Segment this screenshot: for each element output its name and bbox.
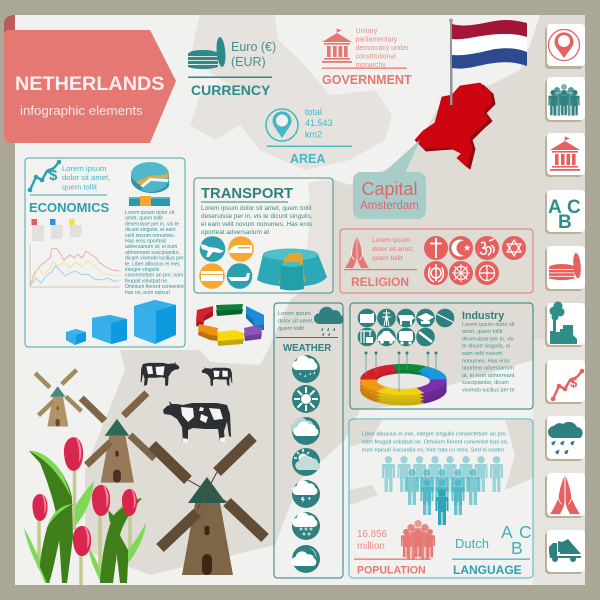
capital callout <box>353 140 426 219</box>
icon: map pin <box>266 109 298 141</box>
industry text: suscipiantur, dicam <box>462 380 509 386</box>
industry text: at, ei eum abhorreant <box>462 373 515 379</box>
sidebar tile: rain <box>545 416 585 461</box>
currency text: Euro (€) <box>231 40 276 54</box>
weather intro: quem tollit <box>278 326 304 332</box>
sidebar tile: pin <box>545 24 585 69</box>
population figure: 16.856 <box>357 529 387 540</box>
government text: Unitary <box>356 28 377 35</box>
cow small left <box>141 362 179 386</box>
industry heading: Industry <box>462 310 504 322</box>
icon: sun <box>292 385 320 413</box>
transport text: deseruisse per in, vis te dicunt singulis, <box>201 213 313 220</box>
economics text: Lorem ipsum dolor sit <box>125 210 174 216</box>
economics intro: quem tollit <box>62 182 98 192</box>
cubes chart <box>66 300 176 345</box>
industry icons <box>358 309 454 346</box>
economics text: dicunt singulis, ei eam <box>125 227 176 233</box>
sidebar tile: growth graph: $ <box>570 375 578 390</box>
economics text: velit novum nonumes. <box>125 233 175 239</box>
religion heading: RELIGION <box>351 275 409 289</box>
icon: praying hands <box>345 237 369 268</box>
transport text: ei eam velit novum nonumes. Has eros <box>201 221 312 228</box>
windmill large <box>152 437 265 575</box>
industry text: Lorem ipsum dolor sit <box>462 322 515 328</box>
pie chart <box>131 162 169 193</box>
economics text: feugait volutpat ne. <box>125 278 168 284</box>
icon: growth graph: $ <box>49 167 58 184</box>
tulip heads <box>64 437 83 471</box>
icon: airplane <box>200 236 225 262</box>
people chart <box>382 456 503 525</box>
sidebar tile: hands <box>545 473 585 518</box>
area text: km2 <box>305 130 322 140</box>
bar strip <box>129 196 170 206</box>
ring chart <box>364 352 438 403</box>
economics text: Omnium fierent convenire <box>125 284 184 290</box>
tulip stems <box>39 468 130 585</box>
subtitle: infographic elements <box>20 103 143 118</box>
title ribbon <box>4 15 176 143</box>
language letters: A <box>501 522 513 542</box>
icon: moon and cloud <box>291 545 320 573</box>
industry text: te dicunt singulis, ei <box>462 344 510 350</box>
capital name: Amsterdam <box>360 200 419 212</box>
segmented ring <box>196 304 264 346</box>
panel: industry <box>350 303 533 409</box>
religion intro: dolor sit amet, <box>372 246 414 253</box>
area block <box>266 107 352 166</box>
sidebar tile: language <box>545 190 585 234</box>
icon: snow <box>292 512 320 540</box>
area text: 41.543 <box>305 118 333 128</box>
religion intro: Lorem ipsum <box>372 237 411 244</box>
transport heading: TRANSPORT <box>201 186 293 202</box>
windmill small <box>35 370 81 426</box>
flag <box>449 18 527 105</box>
transport text: oporteat adversarium at <box>201 229 269 236</box>
3D segment chart <box>257 248 327 290</box>
sidebar tile: truck <box>545 530 585 574</box>
population text: nam feugait volutpat ne. Omnium fierent convenire has no, <box>362 440 509 446</box>
area text: total <box>305 107 322 117</box>
government text: monarchy <box>356 62 386 69</box>
currency text: (EUR) <box>231 55 266 69</box>
icon: growth graph <box>28 160 61 192</box>
currency heading: CURRENCY <box>191 82 271 98</box>
icon: truck <box>199 263 225 289</box>
cow small right <box>202 367 232 386</box>
industry text: nonumes. Has eros <box>462 358 510 364</box>
government text: parliamentary <box>356 36 398 44</box>
population figure: million <box>357 541 385 552</box>
title: NETHERLANDS <box>15 73 164 95</box>
icon: government building <box>322 29 352 63</box>
line chart <box>30 219 120 287</box>
economics intro: dolor sit amet, <box>62 173 110 182</box>
icon: population group <box>401 520 435 560</box>
icon: cloudy <box>290 417 320 445</box>
icon: train <box>228 236 254 262</box>
sidebar tile: language: A <box>548 197 562 218</box>
weather intro: Lorem ipsum <box>278 311 311 317</box>
panel: population and language <box>349 419 533 578</box>
industry text: deseruisse per in, vis <box>462 336 514 342</box>
language name: Dutch <box>455 536 489 551</box>
religion intro: quem tollit <box>372 255 403 262</box>
icon: cross <box>424 236 448 260</box>
government block <box>322 28 412 87</box>
transport text: Lorem ipsum dolor sit amet, quem tollit <box>201 205 312 212</box>
cow large <box>163 401 231 443</box>
icon: sun cross <box>475 261 499 285</box>
industry text: amet, quem tollit <box>462 329 503 335</box>
population text: eum epicuri iracundia ex, hinc tota cu mea. Sed ei nostro <box>362 448 504 454</box>
economics text: deseruisse per in, vis te <box>125 221 179 227</box>
economics text: integre singulis <box>125 267 160 273</box>
economics text: dicam vivendo lucilius per <box>125 256 184 262</box>
icon: crescent <box>449 236 473 260</box>
icon: coins <box>188 37 227 69</box>
icon: rain cloud <box>314 307 344 336</box>
windmill medium <box>81 393 155 483</box>
panel: religion <box>340 229 533 293</box>
capital label: Capital <box>361 179 418 199</box>
economics heading: ECONOMICS <box>29 200 110 215</box>
icon: ship <box>227 263 252 289</box>
language letters: C <box>519 522 532 542</box>
economics text: consectetuer an pro, nam <box>125 273 183 279</box>
economics text: te. Liber albucius ei mei, <box>125 261 180 267</box>
government text: democracy under <box>356 45 409 52</box>
sidebar tile: people <box>545 77 585 122</box>
icon: rain <box>292 355 320 383</box>
icon: khanda <box>424 261 448 285</box>
icon: sun and cloud <box>292 448 320 476</box>
industry text: eam velit novum <box>462 351 502 357</box>
sidebar tile: growth graph <box>545 360 585 404</box>
language letters: B <box>511 538 523 558</box>
economics text: amet, quem tollit <box>125 216 163 222</box>
panel: economics <box>25 158 185 347</box>
weather heading: WEATHER <box>283 343 331 354</box>
sidebar tile: factory <box>545 302 585 347</box>
area heading: AREA <box>290 152 325 166</box>
industry text: vivendo lucilius per te <box>462 388 515 394</box>
icon: star of David <box>502 236 526 260</box>
sidebar tile: coins <box>545 246 585 291</box>
tulips <box>24 437 146 585</box>
government text: constitutional <box>356 54 396 60</box>
economics text: abhorreant suscipiantur, <box>125 250 180 256</box>
sidebar tile: language: B <box>558 212 572 233</box>
economics text: Has eros oporteat <box>125 238 166 244</box>
panel: weather <box>274 303 344 578</box>
economics text: adversarium at, ei eum <box>125 244 177 250</box>
panel: transport <box>194 178 333 293</box>
sidebar tile: language: C <box>567 197 581 218</box>
population heading: POPULATION <box>357 564 426 576</box>
icon: om <box>475 236 499 260</box>
economics text: has no, eum epicuri <box>125 290 170 296</box>
economics intro: Lorem ipsum <box>62 164 106 173</box>
language heading: LANGUAGE <box>453 563 522 577</box>
sidebar tile: government <box>545 133 585 177</box>
weather intro: dolor sit amet, <box>278 318 314 324</box>
population text: Liber albucius ei mei, integre singulis consectetuer an pro, <box>362 432 507 438</box>
industry text: oporteat adversarium <box>462 366 514 372</box>
Netherlands map <box>415 83 495 169</box>
government heading: GOVERNMENT <box>322 73 412 87</box>
icon: dharma wheel <box>449 261 473 285</box>
currency block <box>188 37 276 98</box>
icon: thunderstorm <box>292 480 320 508</box>
tulip leaves <box>24 451 146 583</box>
